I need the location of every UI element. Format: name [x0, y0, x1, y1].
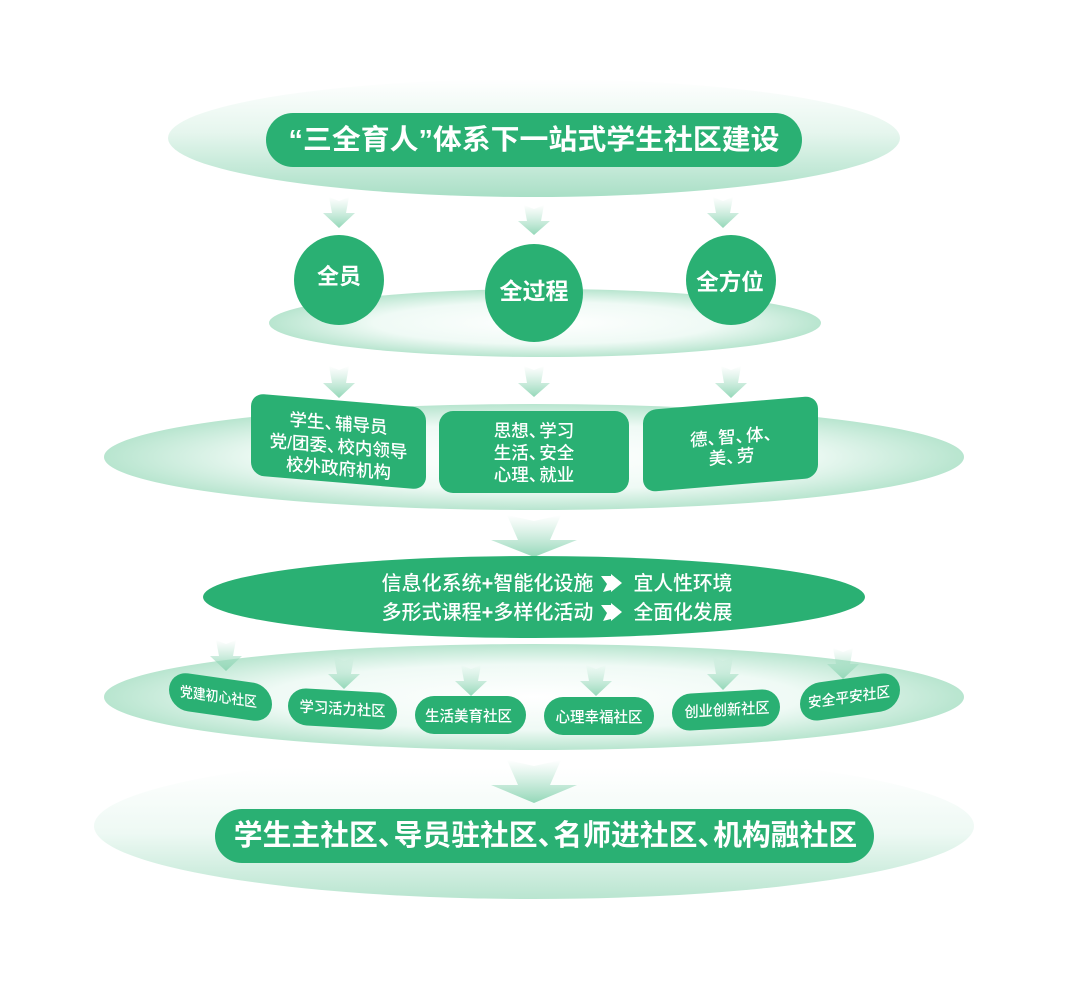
ellipse: environment statement: 全面化发展: [634, 602, 733, 624]
ellipse: environment statement: [203, 556, 865, 638]
ellipse: environment statement: 宜人性环境: [634, 573, 732, 595]
box: 全过程 content: 心理、就业: [494, 465, 574, 485]
icon: arrow line 2: [601, 603, 622, 621]
ellipse: environment statement: 信息化系统+智能化设施: [382, 572, 593, 595]
pill: 心理幸福社区: [544, 697, 654, 735]
box: 全员 content: 校外政府机构: [286, 454, 391, 483]
circle: 全过程: [485, 244, 583, 342]
title pill: “三全育人”体系下一站式学生社区建设: [288, 124, 780, 155]
box: 全方位 content: 德、智、体、: [690, 423, 781, 450]
circle: 全过程: 全过程: [500, 278, 568, 304]
arrow: title to 全员: [323, 197, 355, 228]
box: 全员 content: 学生、辅导员: [290, 409, 387, 438]
box: 全员 content: 党/团委、校内领导: [270, 431, 407, 462]
pill: 心理幸福社区: 心理幸福社区: [556, 709, 642, 726]
pill: 安全平安社区: [800, 671, 900, 723]
icon: arrow line 1: [601, 574, 622, 592]
pill: 生活美育社区: 生活美育社区: [425, 707, 512, 725]
ellipse: boxes platform: [104, 404, 964, 510]
ellipse: circles platform: [269, 289, 821, 357]
arrow: community 2: [328, 657, 360, 689]
bottom pill: 学生主社区、导员驻社区、名师进社区、机构融社区: [234, 820, 857, 852]
ellipse: bottom platform: [94, 753, 974, 899]
pill: 创业创新社区: 创业创新社区: [685, 700, 770, 721]
arrow: title to 全方位: [707, 197, 739, 228]
box: 全员 content: [251, 393, 426, 490]
circle: 全员: [294, 235, 384, 325]
ellipse: environment statement: 多形式课程+多样化活动: [382, 601, 593, 624]
bottom pill: [215, 809, 874, 863]
box: 全过程 content: [439, 411, 629, 493]
arrow: boxes to green ellipse: [491, 515, 577, 557]
box: 全过程 content: 思想、学习: [494, 421, 574, 441]
arrow: title to 全过程: [518, 205, 550, 235]
ellipse: top platform: [168, 79, 900, 197]
circle: 全员: 全员: [317, 264, 361, 289]
title pill: [266, 113, 802, 167]
pill: 创业创新社区: [672, 688, 780, 732]
arrow: 全过程 to box: [518, 366, 550, 397]
pill: 学习活力社区: [288, 687, 397, 731]
pill: 学习活力社区: 学习活力社区: [300, 698, 386, 720]
pill: 党建初心社区: 党建初心社区: [180, 682, 257, 711]
arrow: community 6: [827, 648, 859, 679]
pill: 安全平安社区: 安全平安社区: [808, 682, 890, 712]
ellipse: communities platform: [104, 644, 964, 750]
arrow: 全员 to box: [323, 366, 355, 398]
pill: 党建初心社区: [169, 671, 272, 723]
arrow: community 3: [455, 665, 487, 696]
arrow: communities to bottom: [491, 760, 577, 803]
arrow: community 5: [707, 657, 739, 690]
arrow: community 4: [580, 665, 612, 696]
pill: 生活美育社区: [415, 696, 526, 734]
box: 全方位 content: [643, 396, 818, 492]
arrow: community 1: [210, 640, 242, 671]
box: 全方位 content: 美、劳: [709, 445, 754, 469]
circle: 全方位: [686, 235, 776, 325]
arrow: 全方位 to box: [715, 366, 747, 398]
circle: 全方位: 全方位: [696, 269, 764, 295]
box: 全过程 content: 生活、安全: [494, 443, 575, 463]
